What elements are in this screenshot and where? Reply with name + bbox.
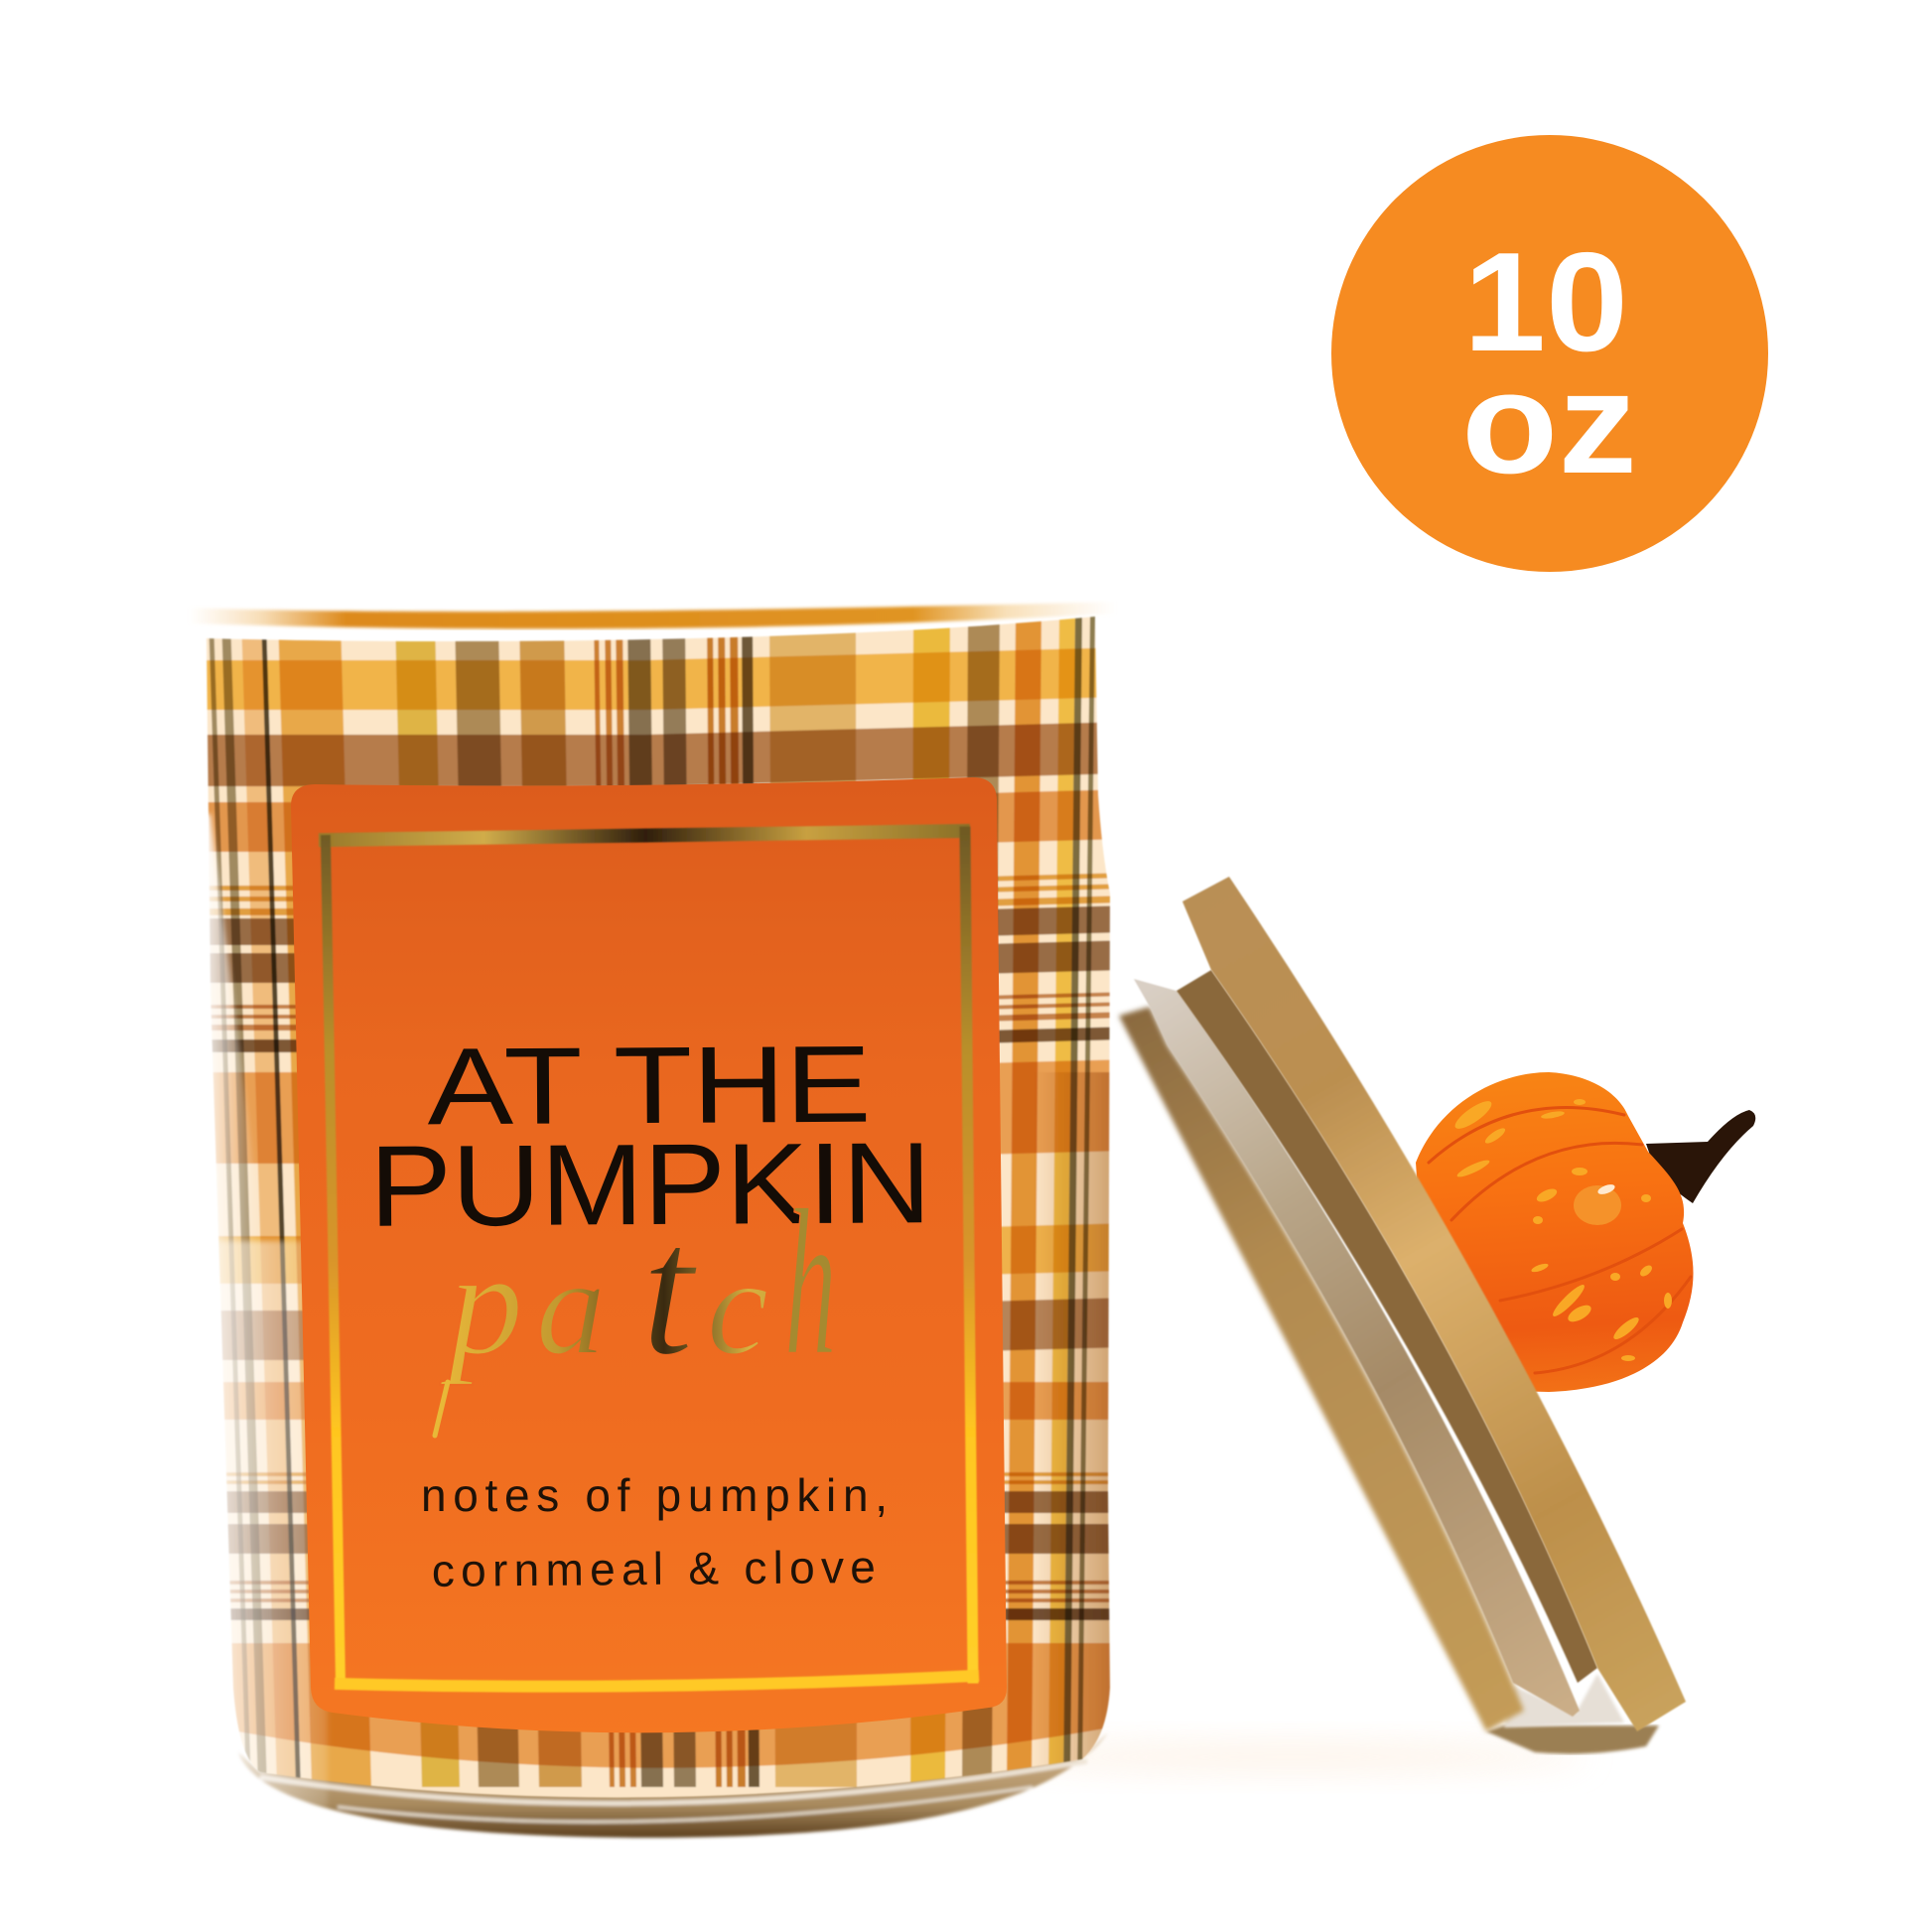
badge text: 10 (1463, 223, 1628, 381)
badge: 10 oz (1331, 135, 1768, 572)
pumpkin speckles (1451, 1097, 1672, 1361)
lid dark groove (1176, 970, 1597, 1683)
right edge warm tint (1040, 1072, 1110, 1765)
glass pumpkin (1416, 1072, 1755, 1392)
lid seal (1134, 979, 1580, 1717)
pumpkin stem (1646, 1110, 1755, 1203)
gold script word: a (536, 1230, 606, 1384)
jar rim (189, 602, 1117, 628)
lid top disc (1182, 877, 1686, 1731)
gold script word: p (440, 1221, 523, 1386)
scent notes (421, 1469, 888, 1596)
gold script word (435, 1167, 837, 1436)
plaid vertical stripes (208, 616, 1095, 1787)
gold script word: t (641, 1186, 698, 1395)
pumpkin body (1416, 1072, 1694, 1392)
gold script word: c (707, 1230, 768, 1384)
lid underside shadow (1486, 1725, 1659, 1754)
lid back plate (1119, 1007, 1524, 1731)
script p descender flourish (435, 1382, 448, 1436)
pumpkin ridges (1429, 1107, 1691, 1373)
gold script word: h (784, 1167, 837, 1400)
scent notes: cornmeal & clove (432, 1541, 876, 1596)
badge circle (1331, 135, 1768, 572)
panel: candle jar (189, 596, 1132, 1847)
plaid wrap (189, 596, 1132, 1847)
lid gap (1504, 1674, 1624, 1727)
gold foil frame (326, 831, 973, 1687)
label sticker (291, 777, 1007, 1732)
floor shadow (993, 1743, 1588, 1771)
left edge fade (199, 814, 328, 1807)
panel: wooden lid with glass pumpkin (1119, 877, 1755, 1754)
glass base (238, 1732, 1108, 1838)
label title (368, 1023, 931, 1251)
plaid horizontal bands (189, 647, 1122, 1768)
scent notes: notes of pumpkin, (421, 1469, 888, 1521)
label title: PUMPKIN (369, 1118, 931, 1251)
badge text: oz (1461, 342, 1637, 503)
badge text (1461, 223, 1637, 503)
label title: AT THE (427, 1024, 872, 1148)
